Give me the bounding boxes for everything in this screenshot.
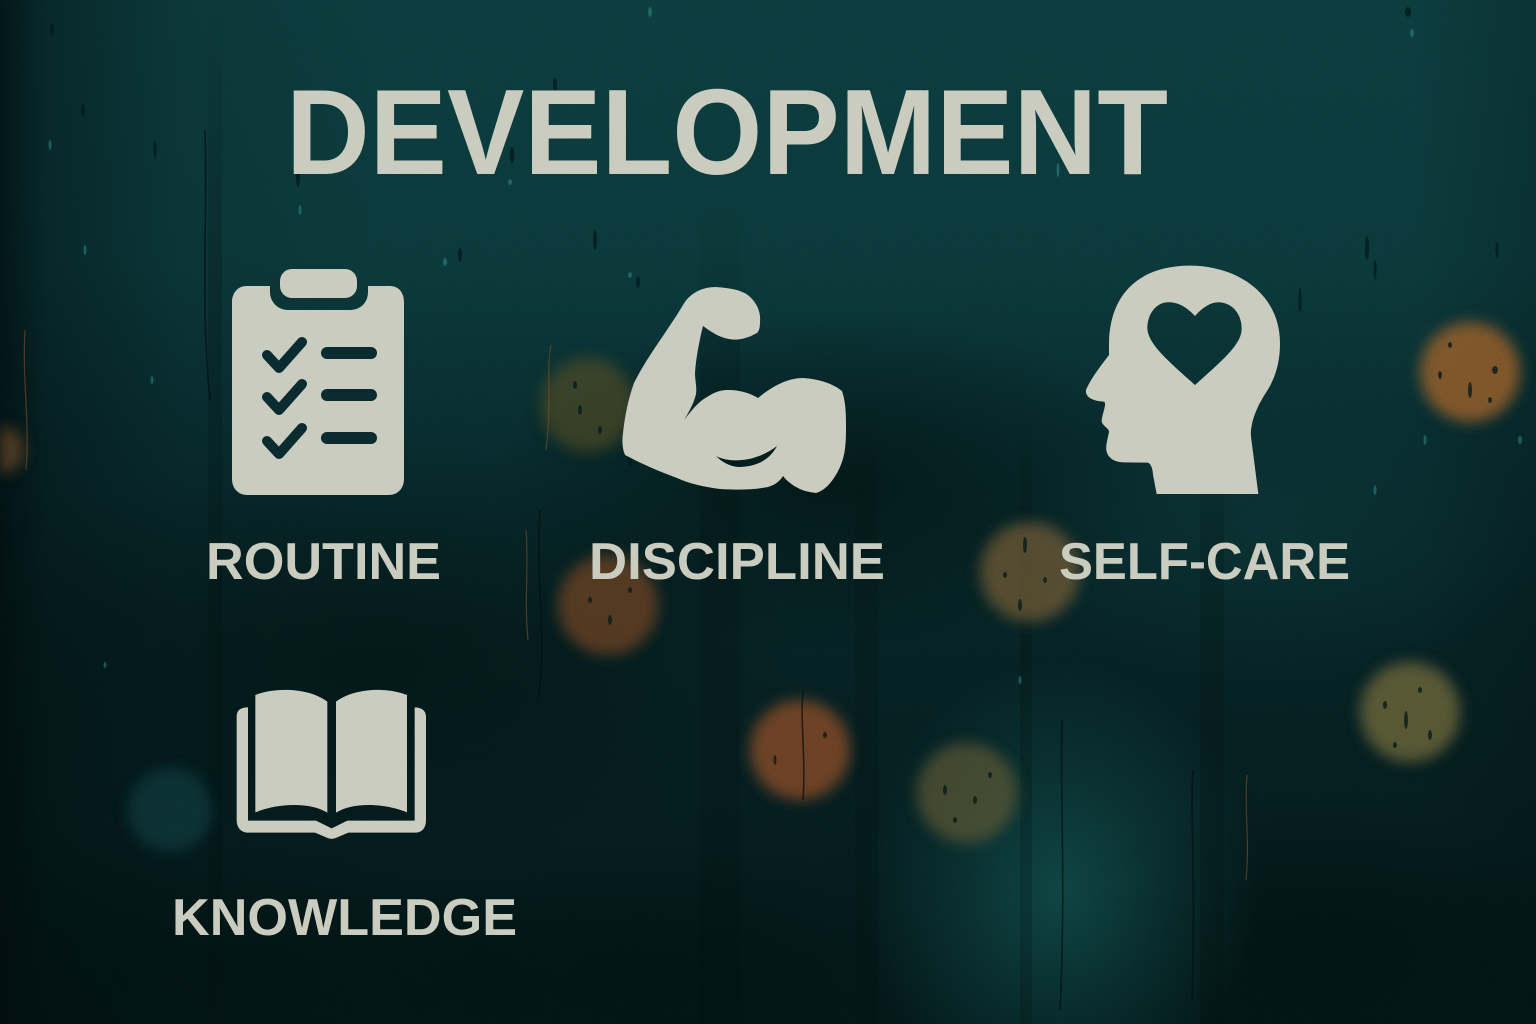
icon: open book (237, 690, 426, 839)
label: routine: ROUTINE (206, 533, 441, 591)
icon: head with heart (1086, 266, 1280, 494)
label: self-care: SELF-CARE (1059, 533, 1350, 591)
title: DEVELOPMENT (286, 64, 1168, 200)
icon: clipboard checklist (232, 269, 404, 495)
label: knowledge: KNOWLEDGE (172, 889, 517, 947)
bokeh lights (0, 322, 1520, 852)
label: discipline: DISCIPLINE (589, 533, 885, 591)
streak bands (208, 0, 1224, 1024)
icon: flexed arm (622, 287, 846, 493)
